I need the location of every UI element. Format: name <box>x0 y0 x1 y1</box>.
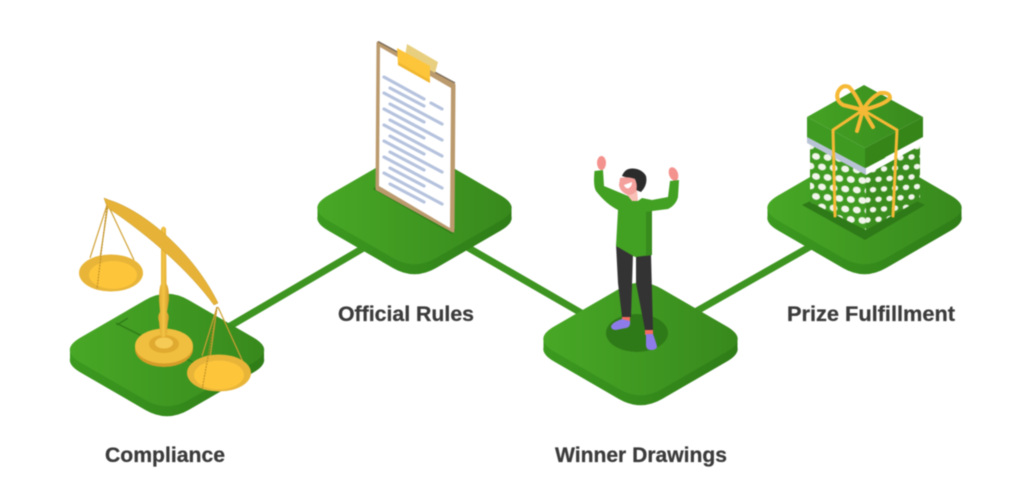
lid underside strips <box>807 137 866 175</box>
right pan <box>187 307 251 392</box>
left pan <box>79 205 143 292</box>
label: Winner Drawings: Winner Drawings <box>555 444 727 467</box>
label: Official Rules: Official Rules <box>338 303 474 326</box>
socks <box>622 317 653 335</box>
panel: prize fulfillment <box>767 85 962 326</box>
scale strings behind pans <box>90 205 243 362</box>
panel: winner drawings <box>543 156 738 467</box>
lid top <box>807 85 923 148</box>
hair <box>622 168 646 192</box>
panel: official rules <box>317 42 512 326</box>
lid sides <box>807 117 865 168</box>
text lines <box>384 77 442 204</box>
platform: prize fulfillment <box>767 152 962 274</box>
icon: clipboard <box>373 42 456 234</box>
panel: compliance <box>70 198 264 467</box>
smile <box>624 182 632 188</box>
clipboard board <box>377 43 454 231</box>
clipboard shadow <box>373 185 456 234</box>
platform etched marks <box>116 318 196 364</box>
beam <box>104 198 218 305</box>
ribbon <box>833 86 897 216</box>
shoes <box>611 319 657 350</box>
head <box>619 177 637 195</box>
icon: cheering person <box>594 156 680 350</box>
gift shadow <box>802 175 925 240</box>
hands <box>597 156 680 182</box>
clip <box>397 44 438 83</box>
neck <box>627 190 638 201</box>
icon: gift box <box>807 85 923 230</box>
platform: compliance <box>70 294 264 416</box>
label: Prize Fulfillment: Prize Fulfillment <box>787 303 955 326</box>
platform: winner drawings <box>543 283 738 405</box>
label: Compliance: Compliance <box>105 444 225 467</box>
sweater <box>594 170 679 257</box>
legs <box>616 244 653 330</box>
paper <box>379 47 451 228</box>
platform shadow circle <box>606 314 668 352</box>
connectors between platforms <box>225 241 820 329</box>
platform: official rules <box>317 152 512 274</box>
stand <box>135 226 193 367</box>
box right face <box>866 145 920 230</box>
box left face <box>810 143 866 230</box>
icon: scales of justice <box>79 198 251 392</box>
